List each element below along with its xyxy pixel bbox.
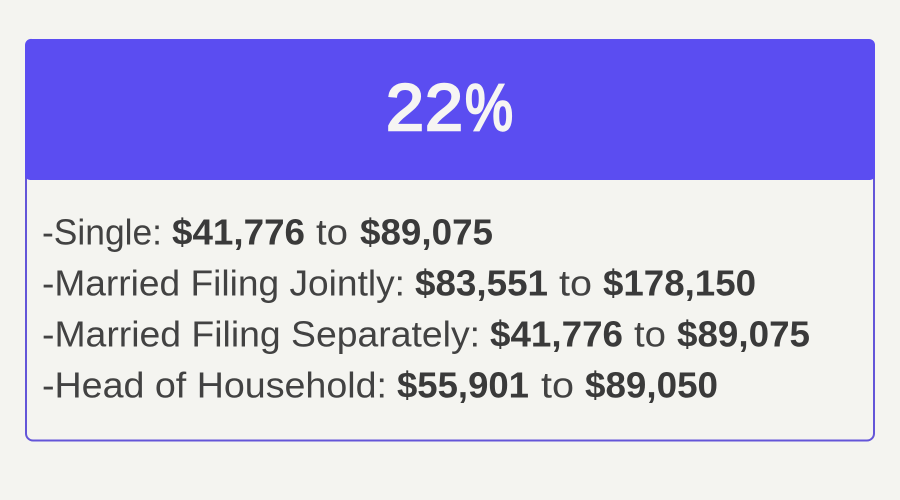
row: single [42, 212, 493, 252]
row: head of household [42, 364, 718, 406]
row: single: to [316, 212, 348, 252]
row: married filing jointly: -Married Filing Jointly: [42, 262, 405, 304]
row: married filing separately: -Married Filing Separately: [42, 314, 480, 354]
heading: 22%: % [465, 70, 513, 144]
row: married filing separately [42, 314, 810, 354]
panel: card outline [26, 40, 874, 440]
row: single: -Single: [42, 212, 162, 252]
row: married filing jointly [42, 262, 756, 304]
row: head of household: $55,901 [397, 364, 529, 406]
row: married filing jointly: $178,150 [603, 262, 756, 304]
heading: 22%: 2 [386, 70, 424, 144]
row: married filing separately: $89,075 [677, 314, 810, 354]
row: head of household: -Head of Household: [42, 364, 387, 406]
panel: header band [25, 39, 875, 180]
heading: 22% [386, 70, 513, 144]
row: married filing separately: to [634, 314, 666, 354]
row: married filing jointly: to [559, 262, 592, 304]
row: head of household: $89,050 [585, 364, 718, 406]
row: single: $89,075 [360, 212, 493, 252]
row: married filing jointly: $83,551 [415, 262, 548, 304]
row: head of household: to [541, 364, 574, 406]
row: married filing separately: $41,776 [490, 314, 623, 354]
text block: income ranges by filing status [42, 212, 810, 406]
heading: 22%: 2 [425, 70, 463, 144]
row: single: $41,776 [172, 212, 305, 252]
